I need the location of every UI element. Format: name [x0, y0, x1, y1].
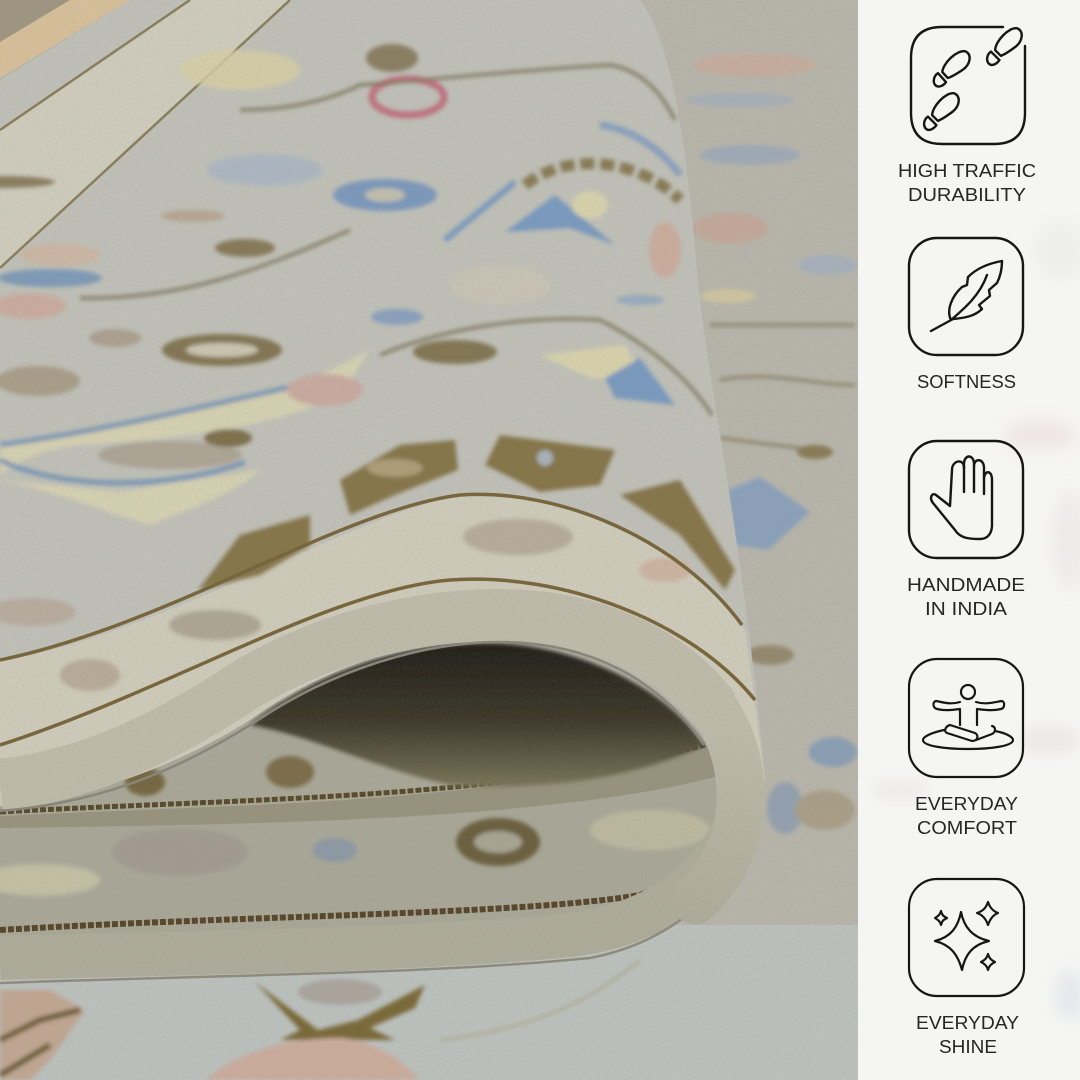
rug border lines [0, 494, 755, 745]
label: EVERYDAY [915, 794, 1018, 814]
cavity shadow [250, 643, 705, 787]
rug rolled edge [0, 615, 741, 900]
label: EVERYDAY [916, 1013, 1019, 1033]
panel: features sidebar [858, 0, 1080, 1080]
panel tint blotches [870, 220, 1080, 1021]
label: SOFTNESS [917, 372, 1016, 392]
icon: feather [909, 238, 1023, 355]
rug border motifs [0, 435, 735, 691]
feature: softness [909, 238, 1023, 392]
feature: everyday shine [909, 879, 1024, 1057]
feature: everyday comfort [909, 659, 1023, 838]
label: SHINE [939, 1037, 997, 1057]
feature: handmade in India [907, 441, 1025, 619]
photo: rolled rug [0, 0, 860, 1080]
label: HIGH TRAFFIC [898, 161, 1036, 181]
rug field motifs [0, 44, 712, 525]
floor rug motifs [685, 53, 858, 834]
rug texture [0, 0, 858, 1080]
icon: sparkles [909, 879, 1024, 996]
icon: meditating figure [909, 659, 1023, 777]
rug bottom hem [0, 830, 735, 958]
icon: hand [909, 441, 1023, 558]
label: HANDMADE [907, 575, 1025, 595]
icon: footprints [911, 24, 1026, 144]
label: DURABILITY [908, 185, 1026, 205]
rug top surface [0, 0, 765, 806]
rug underside [0, 700, 730, 945]
feature: high traffic durability [898, 24, 1036, 205]
label: COMFORT [917, 818, 1017, 838]
label: IN INDIA [925, 599, 1007, 619]
floor rug lower motifs [0, 960, 640, 1080]
